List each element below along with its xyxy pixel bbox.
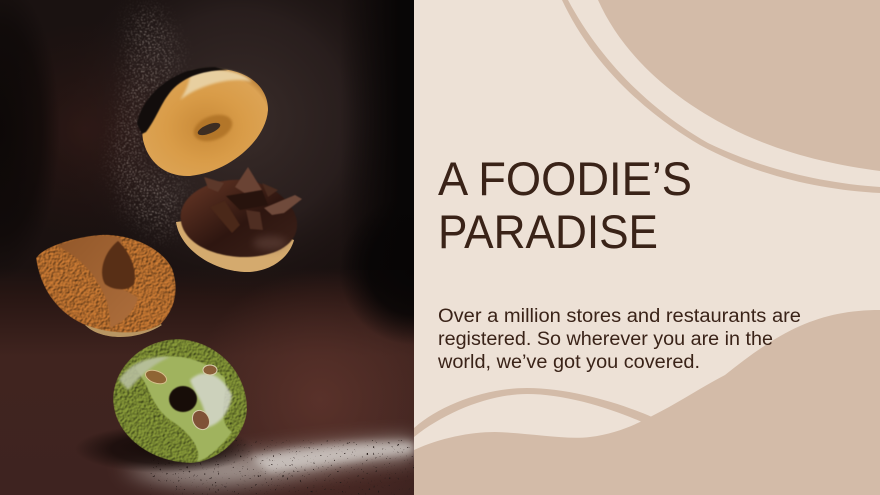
body text: world, we’ve got you covered. <box>437 352 700 373</box>
panel: donut photograph <box>0 0 414 495</box>
photo backdrop <box>0 0 414 495</box>
decorative shape: top right blob <box>598 0 880 171</box>
donut shadow <box>84 430 250 472</box>
body text <box>437 306 801 373</box>
falling sugar dust <box>112 10 185 240</box>
title: PARADISE <box>438 205 658 258</box>
decorative shape: bottom wave <box>414 310 880 495</box>
body text: Over a million stores and restaurants are <box>438 306 801 327</box>
icon: caramel crumb donut <box>36 235 176 337</box>
icon: chocolate donut <box>176 167 302 272</box>
decorative shape: bottom arc band <box>414 388 652 437</box>
body text: registered. So wherever you are in the <box>438 329 773 350</box>
decorative shape: top curved band <box>562 0 880 193</box>
icon: plain glazed donut <box>137 67 268 176</box>
title <box>438 152 692 258</box>
title: A FOODIE’S <box>438 152 692 205</box>
icon: pistachio donut <box>113 339 247 463</box>
chocolate shards <box>204 167 302 233</box>
sugar powder on table <box>120 440 414 495</box>
